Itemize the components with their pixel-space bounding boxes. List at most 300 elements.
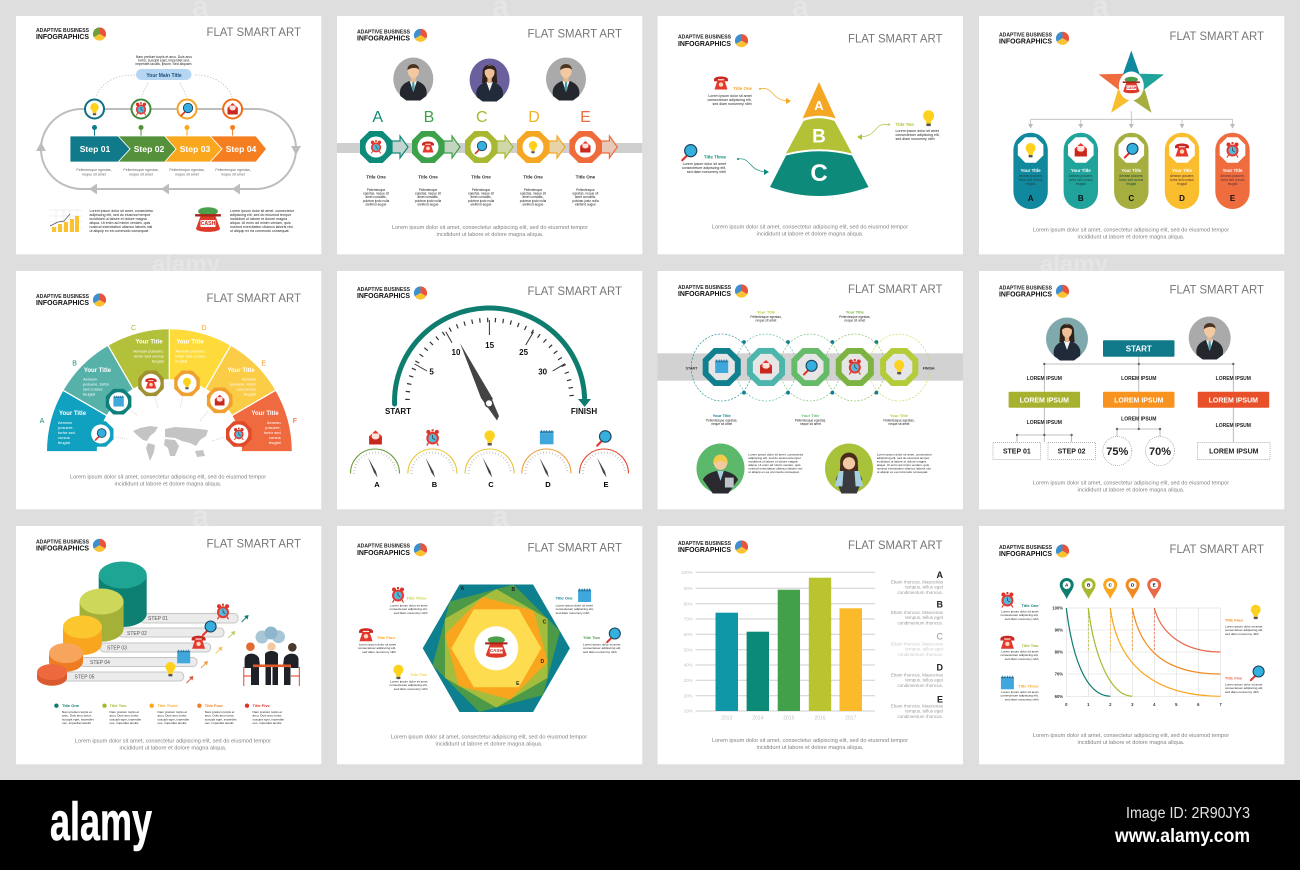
main title text: imperdiet iaculis, ipsum. Sed aliquam. xyxy=(136,62,193,66)
step captions: pulvinar justo nulla xyxy=(415,199,441,203)
body text right: incididunt ut labore et dolore magna xyxy=(230,217,287,221)
step captions: egestas, neque sit xyxy=(415,192,441,196)
logo: ADAPTIVE BUSINESS xyxy=(678,285,731,291)
hexagon letters: C xyxy=(543,620,547,626)
callout: title three: sed diam nonummy nibh xyxy=(687,170,726,174)
alamy logo: alamy xyxy=(50,792,152,852)
segment bodies: Aenean xyxy=(58,420,72,425)
step captions: amet convallis, xyxy=(417,195,439,199)
legend: nec, imperdiet iaculis xyxy=(158,721,187,725)
segment bodies: tortor sed cursus xyxy=(134,354,164,358)
logo xyxy=(357,29,427,42)
bar chart: 2013 xyxy=(721,716,732,722)
step captions: Pellentesque xyxy=(576,188,595,192)
body text left: ut aliquip ex ea commodo consequat. xyxy=(90,229,149,233)
callout: title two: consectetuer adipiscing elit, xyxy=(1000,653,1039,657)
legend A-E: Etiam rhoncus. Maecenas xyxy=(891,580,944,584)
step captions: Title One xyxy=(523,174,543,180)
legend: arcu. Duis arcu tortor, xyxy=(62,714,92,718)
icon: growth chart xyxy=(49,210,82,232)
callout: title three xyxy=(1000,676,1039,702)
panel: org chart xyxy=(979,271,1284,509)
line chart: 2 xyxy=(1109,702,1112,707)
logo xyxy=(36,27,106,41)
pill D: D xyxy=(1179,194,1185,203)
line chart: 60% xyxy=(1055,694,1063,699)
segment bodies: sed cursus xyxy=(236,386,256,392)
link labels: LOREM IPSUM xyxy=(1121,416,1156,422)
heading: FLAT SMART ART xyxy=(206,291,302,305)
pyramid chart: A xyxy=(814,98,824,113)
pyramid chart xyxy=(770,82,868,196)
letters: A xyxy=(372,109,383,126)
segment bodies: cursus xyxy=(58,435,70,440)
start finish labels xyxy=(385,407,597,416)
legend: nec, imperdiet iaculis xyxy=(62,721,91,725)
callout: title two: Title Two xyxy=(896,122,914,127)
pill E: E xyxy=(1230,194,1236,203)
step labels xyxy=(80,144,257,154)
legend: suscipit eget, imperdiet xyxy=(252,717,284,721)
callout: title four: sed diam nonummy nibh xyxy=(1225,632,1259,636)
pill D xyxy=(1165,133,1199,209)
callout: title four: sed diam nonummy nibh xyxy=(362,650,396,654)
logo: INFOGRAPHICS xyxy=(678,289,731,298)
logo: ADAPTIVE BUSINESS xyxy=(357,544,410,550)
icon: cash bag xyxy=(195,207,221,232)
text beside brunette woman: aliqua. Ut enim ad minim veniam, quis xyxy=(877,463,930,467)
titles below xyxy=(706,413,915,426)
segment bodies: sed cursus xyxy=(83,386,102,392)
logo xyxy=(999,285,1069,298)
logo: INFOGRAPHICS xyxy=(36,543,89,552)
line chart: 100% xyxy=(1052,606,1063,610)
pill B: tortor sed cursus xyxy=(1069,178,1093,182)
step captions: egestas, neque sit xyxy=(468,192,494,196)
step captions: amet convallis, xyxy=(522,195,544,199)
titles below: neque sit amet xyxy=(889,422,910,426)
step descriptions: Pellentesque egestas, xyxy=(215,168,251,172)
segment bodies: tortor sed xyxy=(58,430,75,435)
segment bodies: feugiat xyxy=(244,392,257,396)
logo: INFOGRAPHICS xyxy=(357,548,410,557)
map pins: B xyxy=(1087,583,1091,588)
titles above: Your Title xyxy=(757,310,776,314)
outcome labels: 75% xyxy=(1106,446,1129,458)
callout: title five: Lorem ipsum dolor sit amet xyxy=(390,680,428,684)
segment titles: Your Title xyxy=(227,368,255,374)
legend: Title Four xyxy=(205,703,223,708)
panel: bar chart xyxy=(658,526,963,764)
footer text: Lorem ipsum dolor sit amet, consectetur adipiscing elit, sed do eiusmod tempor xyxy=(712,738,908,744)
pill C: Aenean posuere, xyxy=(1119,174,1144,178)
callout: title one: consectetuer adipiscing elit, xyxy=(707,98,752,102)
watermark fragments xyxy=(152,0,1109,533)
letters: E xyxy=(580,109,591,126)
step descriptions: Pellentesque egestas, xyxy=(76,168,112,172)
callout: title three: consectetuer adipiscing elit, xyxy=(389,607,428,611)
segment bodies: posuere, tortor xyxy=(83,382,110,386)
heading: FLAT SMART ART xyxy=(206,537,302,551)
map pins: E xyxy=(1153,583,1156,588)
step descriptions: neque sit amet xyxy=(175,172,199,176)
footer text: incididunt ut labore et dolore magna aliqua. xyxy=(1078,740,1185,746)
segment bodies: feugiat xyxy=(152,358,165,364)
pill E: Your Title xyxy=(1223,168,1243,173)
gauge icons xyxy=(369,429,611,446)
watermark fragments: alamy xyxy=(152,251,221,278)
heading: FLAT SMART ART xyxy=(1170,542,1265,556)
panel: octagon timeline xyxy=(337,16,642,254)
step captions: pulvinar justo nulla xyxy=(520,199,546,203)
step labels xyxy=(74,616,168,681)
step slabs xyxy=(60,614,238,681)
step captions: egestas, neque sit xyxy=(572,192,598,196)
legend A-E: tempus, tellus eget xyxy=(905,709,944,714)
callout: title five: Title Five xyxy=(1225,676,1243,680)
pill C: feugiat xyxy=(1127,182,1136,186)
step captions: Title One xyxy=(418,174,438,180)
heading: FLAT SMART ART xyxy=(848,31,943,45)
legend: suscipit eget, imperdiet xyxy=(110,717,141,721)
pill D: tortor sed cursus xyxy=(1170,178,1194,182)
segment bodies: Aenean xyxy=(267,420,281,425)
callout: title four: consectetuer adipiscing elit, xyxy=(358,646,396,650)
footer text: incididunt ut labore et dolore magna aliqua. xyxy=(1078,234,1185,240)
footer text: incididunt ut labore et dolore magna aliqua. xyxy=(437,232,544,238)
step labels: Step 04 xyxy=(226,144,257,154)
callout: title three: sed diam nonummy nibh xyxy=(394,611,428,615)
text beside blonde woman: nostrud exercitation ullamco laboris nisi xyxy=(748,466,803,470)
callout: title three: Title Three xyxy=(704,154,727,160)
footer text: Lorem ipsum dolor sit amet, consectetur adipiscing elit, sed do eiusmod tempor xyxy=(391,734,587,740)
segment letters: B xyxy=(72,360,77,368)
line chart: 7 xyxy=(1219,702,1222,707)
segment bodies: Aenean xyxy=(242,376,256,382)
callout: title two: sed diam nonummy nibh xyxy=(1005,657,1039,661)
callout: title five: sed diam nonummy nibh xyxy=(394,687,428,691)
legend: arcu. Duis arcu tortor, xyxy=(110,714,139,718)
pill E: Aenean posuere, xyxy=(1220,174,1245,178)
legend: nec, imperdiet iaculis xyxy=(110,721,139,725)
legend A-E: condimentum rhoncus. xyxy=(897,714,943,719)
line chart: 0 xyxy=(1065,702,1068,707)
gauge letters: B xyxy=(432,480,438,489)
callout: title two xyxy=(583,628,621,654)
bar chart: 80% xyxy=(684,601,693,606)
gauge letters: E xyxy=(603,480,609,489)
bar chart: 2016 xyxy=(814,716,826,722)
bar chart: 2015 xyxy=(783,716,795,722)
pill B: B xyxy=(1078,194,1084,203)
logo: ADAPTIVE BUSINESS xyxy=(357,287,410,293)
bar chart: 2014 xyxy=(752,716,764,722)
connector dots xyxy=(742,340,878,395)
callout: title five xyxy=(1225,666,1264,694)
map pins: C xyxy=(1109,583,1113,588)
pill D: Aenean posuere, xyxy=(1170,174,1194,178)
text beside brunette woman: ut aliquip ex ea commodo consequat. xyxy=(877,470,928,474)
main title text: tortor, suscipit eget, imperdiet sed, xyxy=(138,59,190,63)
logo: ADAPTIVE BUSINESS xyxy=(36,294,89,300)
gauge letters: D xyxy=(545,480,551,489)
heading: FLAT SMART ART xyxy=(1170,29,1265,43)
letters: C xyxy=(476,109,488,126)
callout: title one: sed diam nonummy nibh xyxy=(556,611,590,615)
segment titles: Your Title xyxy=(59,411,87,417)
legend A-E: tempus, tellus eget xyxy=(905,585,944,590)
body text right: Lorem ipsum dolor sit amet, consectetur xyxy=(230,209,295,213)
gauge letters: C xyxy=(488,480,494,489)
coloured boxes xyxy=(1009,392,1269,408)
legend: arcu. Duis arcu tortor, xyxy=(205,714,235,718)
outcome labels: 70% xyxy=(1149,446,1171,458)
pill A: A xyxy=(1028,194,1034,203)
legend: Title Two xyxy=(110,703,127,708)
legend A-E: condimentum rhoncus. xyxy=(897,652,943,657)
main gauge xyxy=(395,308,591,420)
line chart: 6 xyxy=(1197,702,1200,707)
start finish labels: START xyxy=(686,366,698,370)
callout: title two: Lorem ipsum dolor sit amet xyxy=(896,129,939,133)
segment titles: Your Title xyxy=(135,340,163,346)
legend: Title Three xyxy=(158,703,178,708)
watermark fragments: alamy xyxy=(1040,251,1109,278)
segment bodies: tortor sed cursus xyxy=(175,354,205,358)
segment bodies: Aenean posuere, xyxy=(175,348,206,354)
step descriptions xyxy=(76,168,251,176)
step captions: Pellentesque xyxy=(524,188,542,192)
link labels: LOREM IPSUM xyxy=(1027,376,1062,382)
legend: Nam pretium turpis et xyxy=(110,710,139,714)
step captions: eleifend augue xyxy=(575,202,596,206)
titles above: Pellentesque egestas, xyxy=(839,315,871,319)
step descriptions: Pellentesque egestas, xyxy=(123,168,159,172)
callout: title four: Title Four xyxy=(1225,618,1244,622)
heading: FLAT SMART ART xyxy=(848,538,943,552)
callout: title two: sed diam nonummy nibh xyxy=(583,650,617,654)
pill A xyxy=(1013,133,1048,209)
step labels: STEP 01 xyxy=(148,616,168,622)
line chart: 3 xyxy=(1131,702,1134,707)
body text left: nostrud exercitation ullamco laboris nisi xyxy=(90,225,152,229)
callout: title three: Title Three xyxy=(406,596,427,600)
step captions: pulvinar justo nulla xyxy=(572,199,599,203)
footer text: incididunt ut labore et dolore magna aliqua. xyxy=(757,232,864,238)
step captions: amet convallis, xyxy=(365,195,387,199)
callout: title three: Lorem ipsum dolor sit amet xyxy=(683,162,726,166)
callout: title one: Title One xyxy=(1021,603,1039,608)
segment letters xyxy=(40,325,297,425)
callout: title one: Lorem ipsum dolor sit amet xyxy=(1001,610,1039,614)
logo: INFOGRAPHICS xyxy=(357,33,410,42)
icon circles xyxy=(85,100,242,118)
panel: decay curves xyxy=(979,526,1284,764)
footer text: incididunt ut labore et dolore magna aliqua. xyxy=(757,745,864,751)
pill D: Your Title xyxy=(1172,168,1192,173)
segment letters: F xyxy=(293,418,297,425)
main title pill xyxy=(136,69,192,80)
pill A: feugiat xyxy=(1026,182,1035,186)
panel: star hierarchy xyxy=(979,16,1284,254)
text beside blonde woman: aliqua. Ut enim ad minim veniam, quis xyxy=(748,463,801,467)
fan segments xyxy=(46,329,292,452)
footer text: Lorem ipsum dolor sit amet, consectetur adipiscing elit, sed do eiusmod tempor xyxy=(1033,480,1229,486)
logo xyxy=(36,293,106,307)
letters: B xyxy=(424,109,434,126)
panel: cylinder steps xyxy=(16,526,321,764)
bar chart: 20% xyxy=(684,693,693,698)
segment letters: E xyxy=(261,360,266,368)
map pins: A xyxy=(1065,583,1069,588)
watermark fragments: a xyxy=(492,500,509,533)
callout: title three: consectetuer adipiscing elit, xyxy=(682,166,726,170)
logo xyxy=(678,540,748,554)
image id: Image ID: 2R90JY3 xyxy=(1126,805,1250,822)
panel: octagon circles xyxy=(658,271,963,509)
legend: Title Five xyxy=(252,703,271,708)
dashed outcome boxes xyxy=(993,436,1270,466)
hexagon letters: D xyxy=(540,659,544,665)
bar chart: 30% xyxy=(684,678,693,683)
logo: INFOGRAPHICS xyxy=(999,36,1052,45)
step labels: STEP 03 xyxy=(107,646,127,652)
step captions: amet convallis, xyxy=(575,195,596,199)
outcome labels: STEP 02 xyxy=(1058,448,1086,456)
panel: pyramid xyxy=(658,16,963,254)
pyramid chart: B xyxy=(812,126,826,148)
text beside brunette woman: adipiscing elit, sed do eiusmod tempor xyxy=(877,456,929,460)
octagons xyxy=(703,348,918,386)
pill C xyxy=(1114,133,1148,209)
callout: title three: consectetuer adipiscing elit, xyxy=(1000,694,1039,698)
letters: D xyxy=(528,109,540,126)
coloured boxes: LOREM IPSUM xyxy=(1020,397,1069,404)
step pins xyxy=(92,125,235,136)
segment letters: D xyxy=(201,325,207,332)
callout: title one: Title One xyxy=(733,86,753,91)
logo xyxy=(999,544,1069,558)
pill A: Your Title xyxy=(1021,168,1041,173)
pill E: feugiat xyxy=(1228,182,1237,186)
step captions: pulvinar justo nulla xyxy=(363,199,389,203)
callout: title two: Lorem ipsum dolor sit amet xyxy=(1001,650,1039,654)
logo: INFOGRAPHICS xyxy=(678,39,731,48)
step icons xyxy=(165,604,229,676)
step captions: eleifend augue xyxy=(366,202,387,206)
callout: title three: Lorem ipsum dolor sit amet xyxy=(390,604,428,608)
pyramid chart: C xyxy=(810,160,828,187)
world map xyxy=(133,426,208,461)
pill E: tortor sed cursus xyxy=(1221,178,1245,182)
text beside blonde woman: ut aliquip ex ea commodo consequat. xyxy=(748,470,800,474)
legend A-E: D xyxy=(936,662,944,672)
logo: ADAPTIVE BUSINESS xyxy=(678,35,731,41)
step captions: Title One xyxy=(471,174,491,180)
segment bodies: Aenean xyxy=(83,376,97,382)
logo: ADAPTIVE BUSINESS xyxy=(357,29,410,35)
link labels: LOREM IPSUM xyxy=(1121,376,1156,382)
start finish labels: FINISH xyxy=(571,407,597,416)
hexagon letters: B xyxy=(511,587,515,593)
footer text: incididunt ut labore et dolore magna aliqua. xyxy=(115,482,222,488)
map pins: D xyxy=(1131,583,1135,588)
logo: INFOGRAPHICS xyxy=(999,289,1052,298)
portrait: brunette woman xyxy=(825,444,873,494)
loop arrows xyxy=(36,109,301,194)
segment bodies: tortor sed xyxy=(264,430,281,435)
callout: title five xyxy=(389,665,428,691)
callout: title one: consectetuer adipiscing elit, xyxy=(1000,613,1039,617)
callout: title one: sed diam nonummy nibh xyxy=(1005,617,1039,621)
pill E xyxy=(1215,133,1250,209)
portraits xyxy=(393,58,586,102)
footer bar xyxy=(0,780,1300,870)
legend A-E: tempus, tellus eget xyxy=(905,615,944,620)
segment titles: Your Title xyxy=(176,340,204,346)
portrait: blonde woman xyxy=(696,444,744,494)
pill B: Your Title xyxy=(1071,168,1091,173)
line chart: 70% xyxy=(1055,672,1063,676)
titles below: Your Title xyxy=(801,413,820,418)
step labels: Step 01 xyxy=(80,144,111,154)
logo: ADAPTIVE BUSINESS xyxy=(36,28,89,34)
callout: title two: Title Two xyxy=(1022,643,1039,648)
segment titles: Your Title xyxy=(84,368,112,374)
heading: FLAT SMART ART xyxy=(528,26,623,40)
legend: Nam pretium turpis et xyxy=(252,710,282,714)
step descriptions: neque sit amet xyxy=(221,172,245,176)
small gauges xyxy=(350,449,628,478)
link labels: LOREM IPSUM xyxy=(1027,420,1062,426)
panel: step loop xyxy=(16,16,321,254)
legend: nec, imperdiet iaculis xyxy=(205,721,234,725)
footer text: incididunt ut labore et dolore magna aliqua. xyxy=(1078,488,1185,494)
footer text: Lorem ipsum dolor sit amet, consectetur adipiscing elit, sed do eiusmod tempor xyxy=(712,224,908,230)
hexagon letters: A xyxy=(460,586,464,592)
body text right: aliqua. Ut enim ad minim veniam, quis xyxy=(230,221,291,225)
coloured boxes: LOREM IPSUM xyxy=(1114,397,1164,404)
step labels: STEP 02 xyxy=(127,631,147,637)
segment bodies: Aenean posuere, xyxy=(133,348,164,354)
titles above: Your Title xyxy=(846,310,865,314)
bar chart: 40% xyxy=(684,663,693,668)
step captions: Pellentesque xyxy=(367,188,385,192)
line chart xyxy=(1052,606,1222,707)
main gauge: 10 xyxy=(452,348,461,357)
step captions: egestas, neque sit xyxy=(363,192,389,196)
main title pill: Your Main Title xyxy=(146,73,182,79)
step captions: Pellentesque xyxy=(419,188,437,192)
hexagon stack xyxy=(418,574,575,722)
footer text: Lorem ipsum dolor sit amet, consectetur adipiscing elit, sed do eiusmod tempor xyxy=(1033,228,1229,234)
logo: ADAPTIVE BUSINESS xyxy=(999,285,1052,291)
legend A-E: condimentum rhoncus. xyxy=(897,683,943,688)
step captions: eleifend augue xyxy=(418,202,439,206)
callout: title five: consectetuer adipiscing elit, xyxy=(1225,686,1263,690)
legend: nec, imperdiet iaculis xyxy=(252,721,282,725)
footer text: Lorem ipsum dolor sit amet, consectetur adipiscing elit, sed do eiusmod tempor xyxy=(70,474,266,480)
legend A-E xyxy=(891,570,944,719)
callout: title four: consectetuer adipiscing elit, xyxy=(1225,628,1263,632)
step descriptions: Pellentesque egestas, xyxy=(169,168,205,172)
star with cash icon xyxy=(1099,51,1164,113)
step captions: pulvinar justo nulla xyxy=(468,199,494,203)
step labels: Step 02 xyxy=(134,144,165,154)
step captions: eleifend augue xyxy=(471,202,492,206)
start finish labels: START xyxy=(385,407,411,416)
watermark fragments: a xyxy=(192,500,209,533)
